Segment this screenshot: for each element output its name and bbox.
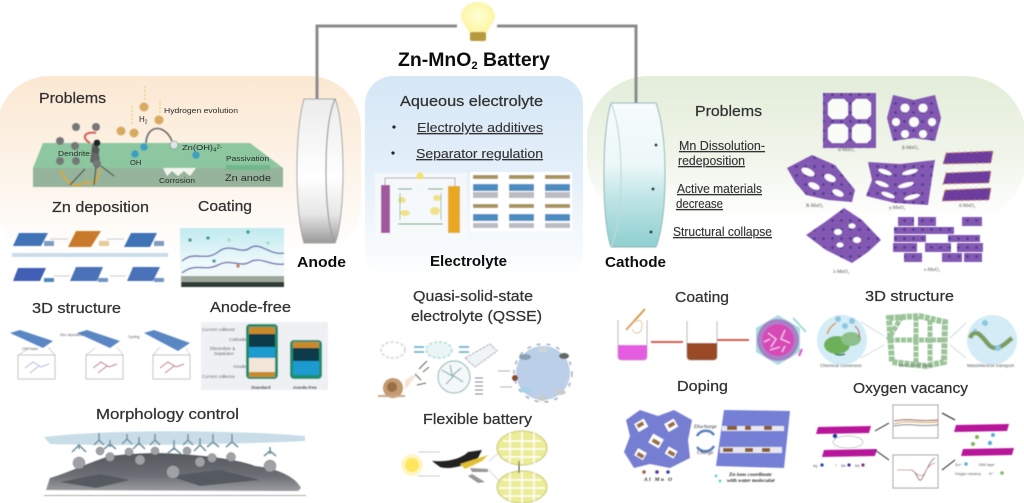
illustration: anode 3D foam: Cycling <box>128 335 140 339</box>
crystal labels: λ-MnO₂ <box>833 270 850 275</box>
illustration: anode-free cells: Current collector <box>202 374 236 379</box>
R-MnO2 <box>787 155 855 202</box>
illustration: doping crystals: Charge <box>697 450 714 456</box>
crystal labels: α-MnO₂ <box>838 148 855 153</box>
heading: quasi-solid-state electrolyte: electrolyte (QSSE) <box>411 308 542 325</box>
list: cathode problems: decrease <box>676 197 723 211</box>
heading: cathode problems: Problems <box>695 103 762 120</box>
circuit wire <box>317 26 636 104</box>
illustration: QSSE <box>378 342 572 402</box>
list: cathode problems: Mn Dissolution- <box>679 139 765 153</box>
heading: zn deposition: Zn deposition <box>52 199 149 216</box>
illustration: cathode 3D structure: Mass/electron transport <box>967 363 1015 368</box>
list: electrolyte strategies: Separator regulation <box>416 146 543 161</box>
illustration: morphology control <box>44 431 306 496</box>
illustration: anode 3D foam <box>10 330 190 379</box>
illustration labels: Corrosion <box>159 178 195 185</box>
cathode label: Cathode <box>605 254 666 271</box>
heading: cathode coating: Coating <box>675 289 729 306</box>
delta MnO2 <box>942 151 993 201</box>
illustration: oxygen vacancy: H⁺ <box>989 472 994 476</box>
illustration: anode-free cells: Cathode <box>229 337 247 342</box>
panel: anode background <box>0 76 361 256</box>
title: Zn-MnO <box>398 50 470 71</box>
heading: morphology control: Morphology control <box>96 406 239 423</box>
illustration labels: Hydrogen evolution <box>164 106 238 115</box>
illustration labels: 4 <box>213 148 217 154</box>
alpha MnO2 <box>823 93 876 148</box>
list: electrolyte strategies <box>391 120 544 161</box>
heading: anode 3D structure: 3D structure <box>32 300 121 317</box>
heading: aqueous electrolyte: Aqueous electrolyte <box>400 93 543 110</box>
list: cathode problems: redeposition <box>678 154 745 168</box>
illustration: anode-free cells <box>201 322 328 390</box>
panel: electrolyte background <box>365 76 583 281</box>
illustration labels: Passivation <box>226 154 269 163</box>
anode label: Anode <box>297 254 346 271</box>
illustration labels: 2- <box>216 144 222 150</box>
illustration: oxygen vacancy: Mn <box>855 464 860 468</box>
crystal labels: ε-MnO₂ <box>924 268 940 273</box>
illustration: anode 3D foam: Zinc deposition <box>60 333 84 337</box>
list: cathode problems: Structural collapse <box>673 225 772 239</box>
anode section <box>10 86 328 496</box>
beta MnO2 <box>887 95 941 141</box>
illustration: doping crystals: Zn ions coordinate <box>728 472 772 478</box>
cathode disc <box>604 103 665 247</box>
heading: cathode 3D structure: 3D structure <box>865 288 954 305</box>
title: Battery <box>478 50 550 71</box>
illustration: zinc anode problems <box>33 86 283 187</box>
heading: oxygen vacancy: Oxygen vacancy <box>853 380 969 397</box>
heading: flexible battery: Flexible battery <box>423 411 533 428</box>
illustration: doping crystals: with water molecular <box>727 478 776 484</box>
illustration: anode-free cells: Separator <box>214 351 234 356</box>
illustration: cathode 3D structure: Chemical conversion <box>820 363 862 368</box>
illustration labels: 2 <box>145 120 148 126</box>
illustration: anode-free cells: Current collector <box>202 327 236 332</box>
illustration: oxygen vacancy: Zn²⁺ <box>955 463 962 467</box>
illustration: anode-free cells: Standard <box>251 385 271 390</box>
illustration: oxygen vacancy: EBS layer <box>979 463 995 467</box>
illustration labels <box>58 106 271 185</box>
crystal structures: MnO2 polymorphs <box>787 93 993 275</box>
heading: doping: Doping <box>677 378 728 395</box>
list: electrolyte strategies: Electrolyte additives <box>417 120 544 135</box>
anode disc <box>297 99 343 243</box>
illustration: oxygen vacancy <box>813 405 1014 488</box>
illustration: oxygen vacancy: Mn <box>841 464 846 468</box>
gamma MnO2 <box>866 160 935 205</box>
electrolyte section <box>375 93 572 503</box>
illustration: doping crystals <box>624 410 790 484</box>
icon: light bulb <box>461 2 495 41</box>
illustration: cathode 3D structure <box>817 315 1017 368</box>
illustration: anode-free cells: Anode-free <box>293 385 317 390</box>
lambda holes <box>834 224 861 248</box>
title: 2 <box>471 60 478 72</box>
crystal labels: δ-MnO₂ <box>959 204 976 209</box>
illustration: anode-free cells: Anode <box>233 364 247 369</box>
illustration labels: Dendrite <box>58 149 90 158</box>
heading: problems: Problems <box>39 90 106 107</box>
heading: quasi-solid-state electrolyte <box>411 288 542 325</box>
heading: quasi-solid-state electrolyte: Quasi-solid-state <box>413 288 533 305</box>
heading: anode-free: Anode-free <box>210 299 291 316</box>
illustration: coating synthesis <box>618 309 806 365</box>
crystal labels: β-MnO₂ <box>902 146 919 151</box>
illustration: zn deposition steps <box>12 231 168 282</box>
heading: anode coating: Coating <box>198 198 252 215</box>
illustration: doping crystals: Al Mn O <box>643 477 672 483</box>
panel: cathode background <box>587 76 1024 221</box>
illustration labels: Zn(OH) <box>182 143 207 152</box>
epsilon MnO2 <box>893 217 983 262</box>
illustration: anode coating layers <box>180 228 284 287</box>
illustration labels: H <box>139 115 145 124</box>
illustration: cathode 3D structure: MnO₂/CNT foam <box>899 363 932 368</box>
illustration: oxygen vacancy: Oxygen vacancy <box>955 472 981 476</box>
illustration labels: OH <box>130 158 141 167</box>
crystal labels <box>806 146 976 275</box>
list: cathode problems: Active materials <box>677 182 762 196</box>
illustration: anode 3D foam: CNT foam <box>22 347 38 351</box>
lambda MnO2 <box>806 208 881 263</box>
illustration: doping crystals: Discharge <box>693 424 717 430</box>
illustration labels: Zn anode <box>225 173 271 183</box>
illustration: flexible battery <box>401 431 547 503</box>
list: cathode problems <box>673 139 772 239</box>
illustration: electrolyte cell schematic <box>375 172 467 239</box>
crystal labels: γ-MnO₂ <box>889 206 905 211</box>
illustration: anode-free cells: Electrolyte & <box>210 346 235 351</box>
cathode section <box>618 93 1017 488</box>
electrolyte label: Electrolyte <box>430 253 507 270</box>
illustration: oxygen vacancy: Ag <box>813 464 817 468</box>
illustration: separator stacks <box>470 172 572 231</box>
crystal labels: R-MnO₂ <box>806 204 824 209</box>
